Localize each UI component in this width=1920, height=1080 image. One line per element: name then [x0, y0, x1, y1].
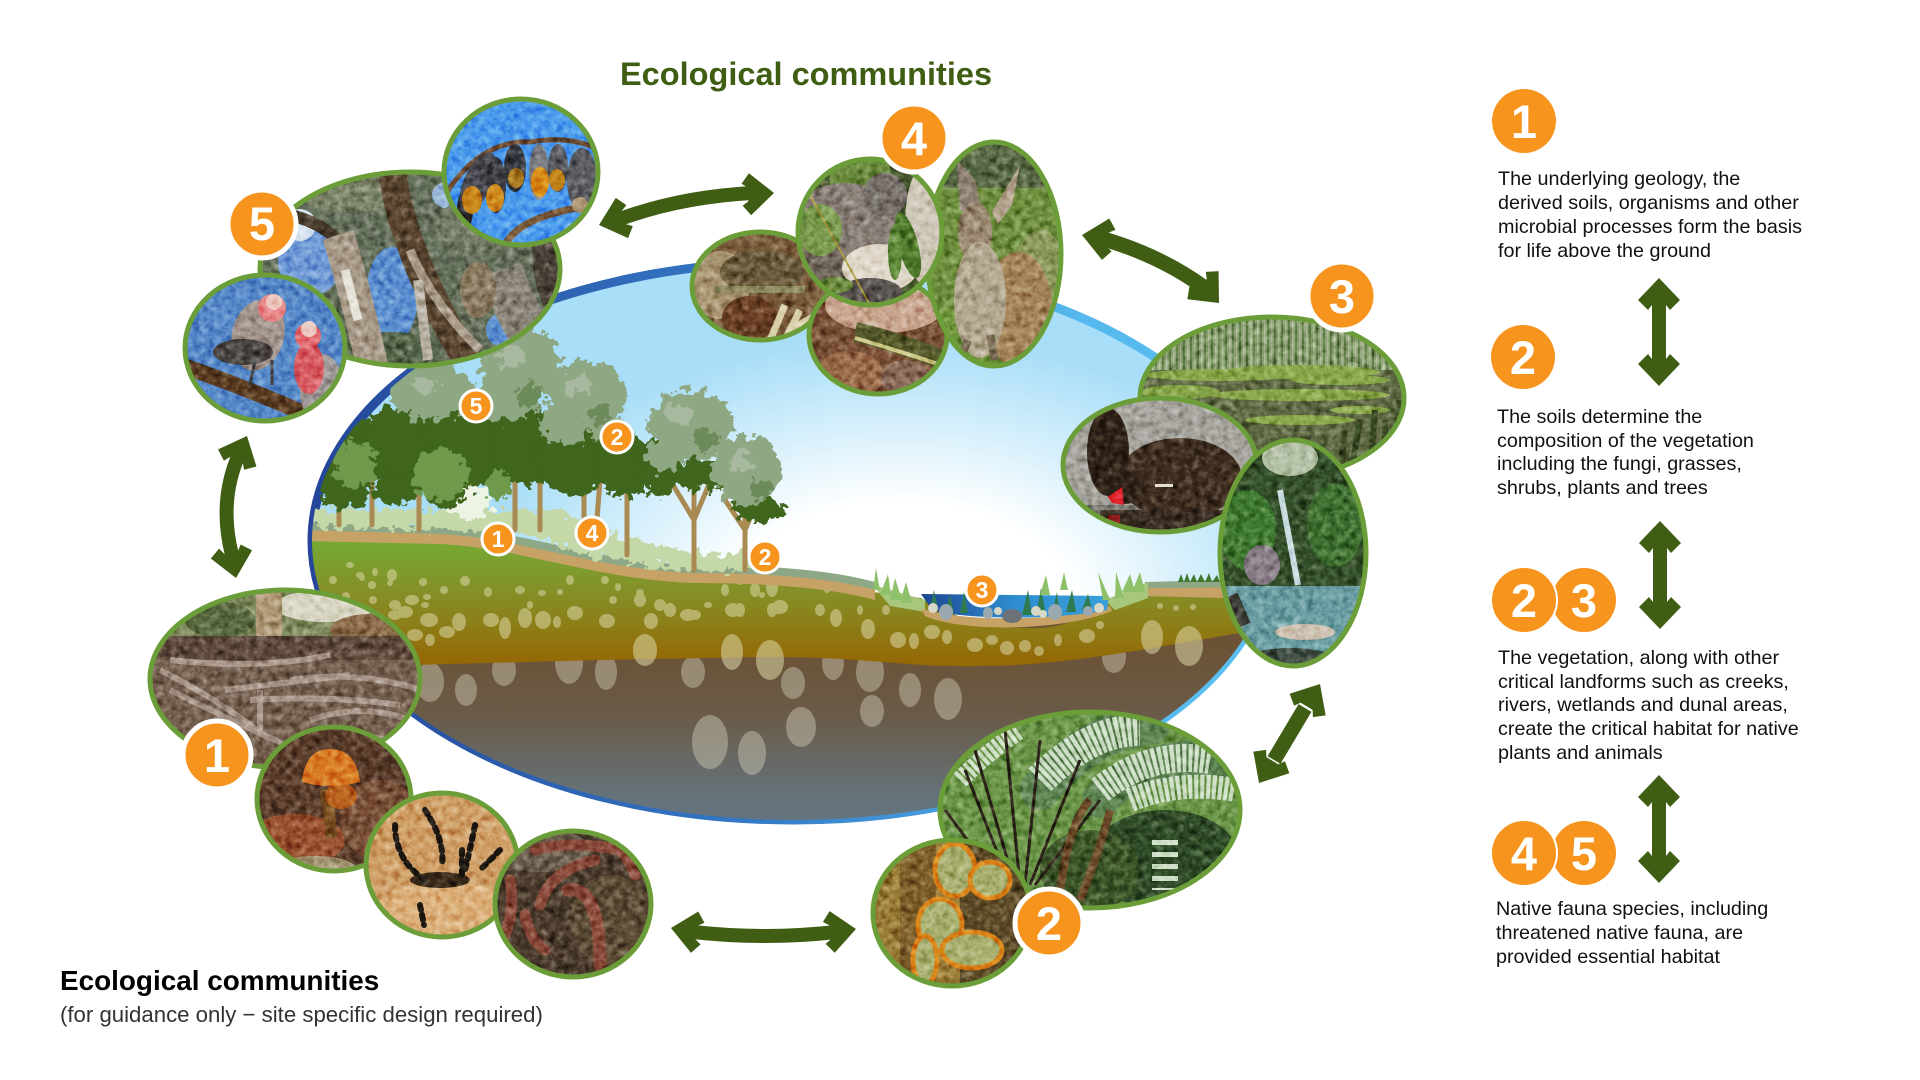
- photo: mushroom: [254, 724, 414, 874]
- step 2 text: The soils determine the: [1497, 406, 1702, 428]
- photo: black swan: [1058, 395, 1263, 538]
- step 2 text: [1497, 406, 1754, 499]
- badge 4: 4: [901, 112, 927, 165]
- map marker 5: [460, 390, 492, 422]
- badge 2: [1015, 889, 1083, 957]
- step 1 text: for life above the ground: [1498, 240, 1711, 262]
- badge 4: [880, 104, 948, 172]
- photo: tree fern: [935, 708, 1245, 912]
- step 4 numbers: 5: [1571, 827, 1597, 880]
- step 1 text: microbial processes form the basis: [1498, 216, 1802, 238]
- step 1 text: The underlying geology, the: [1498, 168, 1740, 190]
- map marker 1: [482, 523, 514, 555]
- photo: earthworms: [490, 826, 656, 982]
- step 3 text: rivers, wetlands and dunal areas,: [1498, 694, 1788, 716]
- arrow: step 2 to 3: [1639, 521, 1681, 629]
- map marker 2 lower: [749, 541, 781, 573]
- step 4 numbers: 4: [1511, 827, 1537, 880]
- step 2 number: 2: [1510, 331, 1536, 384]
- photo: waterfall: [1215, 436, 1371, 676]
- surface bands: [300, 522, 1300, 627]
- step 1 number: 1: [1511, 95, 1537, 148]
- step 1 number: [1492, 89, 1556, 153]
- step 1 text: [1498, 168, 1802, 262]
- step 2 text: shrubs, plants and trees: [1497, 477, 1708, 499]
- map marker 4: [576, 517, 608, 549]
- step 3 numbers: 3: [1571, 574, 1597, 627]
- footer caption: (for guidance only − site specific design required): [60, 1002, 543, 1027]
- step 2 number: [1491, 325, 1555, 389]
- step 3 text: [1498, 647, 1799, 764]
- arrow: left: [209, 427, 266, 582]
- map marker 1: 1: [492, 526, 505, 552]
- footer caption: Ecological communities: [60, 965, 379, 996]
- trees: [310, 325, 784, 570]
- map marker 5: 5: [470, 393, 483, 419]
- step 3 numbers: [1491, 567, 1616, 633]
- arrow: step 1 to 2: [1638, 278, 1680, 386]
- photo: ants: [360, 788, 524, 942]
- step 3 text: critical landforms such as creeks,: [1498, 671, 1789, 693]
- arrow: bottom: [667, 907, 859, 954]
- arrow: right: [1241, 673, 1338, 794]
- photo: paperbark tree: [255, 165, 565, 375]
- photo: kangaroo: [924, 138, 1065, 370]
- map marker 2 upper: [601, 421, 633, 453]
- title: Ecological communities: [620, 56, 992, 92]
- badge 2: 2: [1036, 897, 1062, 950]
- step 3 text: plants and animals: [1498, 742, 1663, 764]
- arrow: top left: [593, 172, 775, 245]
- step 2 text: including the fungi, grasses,: [1497, 453, 1742, 475]
- photo: galahs: [180, 270, 352, 426]
- photo: bracket fungi: [868, 836, 1036, 992]
- footer caption: [60, 965, 543, 1027]
- arrow: top right: [1078, 214, 1235, 317]
- step 4 numbers: [1491, 820, 1616, 886]
- map marker 2 upper: 2: [611, 424, 623, 450]
- map marker 3: [966, 574, 998, 606]
- photo: carpet python: [806, 286, 949, 396]
- step 3 text: The vegetation, along with other: [1498, 647, 1779, 669]
- step 3 text: create the critical habitat for native: [1498, 718, 1799, 740]
- photo: leaf litter: [146, 586, 424, 772]
- badge 1: 1: [204, 729, 230, 782]
- lower rock layer: [413, 622, 1243, 820]
- map marker 3: 3: [976, 577, 988, 603]
- badge 5: 5: [249, 197, 275, 250]
- badge 1: [183, 721, 251, 789]
- badge 3: [1308, 262, 1376, 330]
- arrow: step 3 to 4: [1638, 775, 1680, 883]
- map marker 2 lower: 2: [759, 544, 771, 570]
- badge 3: 3: [1329, 270, 1355, 323]
- badge 5: [228, 190, 296, 258]
- step 2 text: composition of the vegetation: [1497, 430, 1754, 452]
- photo: koala: [790, 155, 945, 310]
- photo: goanna: [688, 228, 833, 346]
- step 3 numbers: 2: [1511, 574, 1537, 627]
- step 4 text: Native fauna species, including: [1496, 898, 1768, 920]
- central landscape illustration: [60, 89, 1802, 1027]
- step 4 text: threatened native fauna, are: [1496, 922, 1743, 944]
- photo: flying foxes: [440, 95, 602, 250]
- step 4 text: [1496, 898, 1768, 968]
- step 1 text: derived soils, organisms and other: [1498, 192, 1799, 214]
- map marker 4: 4: [586, 520, 599, 546]
- creek: [873, 568, 1220, 623]
- upper soil layer: [300, 540, 1300, 680]
- step 4 text: provided essential habitat: [1496, 946, 1720, 968]
- photo: wetland: [1138, 314, 1406, 468]
